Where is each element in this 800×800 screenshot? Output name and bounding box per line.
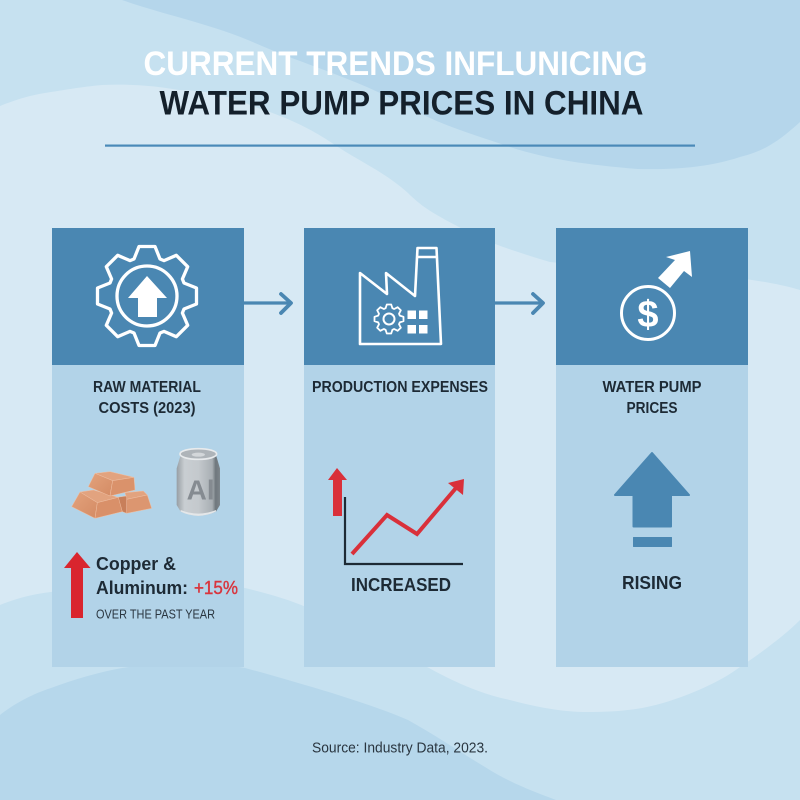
title: WATER PUMP PRICES IN CHINA — [160, 84, 644, 122]
arrow: production to prices — [495, 294, 543, 313]
stat: copper and aluminum increase — [96, 553, 238, 598]
panel heading: PRICES — [626, 400, 678, 417]
icon: dollar coin with arrow — [622, 251, 692, 340]
chart label: INCREASED — [351, 574, 451, 595]
stat: copper and aluminum increase: Copper & — [96, 553, 176, 574]
panel heading: RAW MATERIAL — [93, 379, 201, 396]
icon: factory with gear — [360, 248, 441, 344]
source note: Source: Industry Data, 2023. — [312, 740, 488, 756]
icon: red up arrow — [328, 468, 347, 516]
panel heading: WATER PUMP — [602, 379, 702, 396]
panel: production expenses — [304, 228, 495, 667]
title: CURRENT TRENDS INFLUNICING — [144, 45, 648, 83]
icon: blue up arrow — [615, 453, 689, 546]
icon: dollar coin with arrow: $ — [637, 294, 659, 336]
panel heading: PRODUCTION EXPENSES — [312, 379, 488, 396]
panel heading — [93, 379, 201, 417]
stat: copper and aluminum increase: +15% — [194, 577, 238, 598]
title — [144, 45, 648, 122]
panel heading: COSTS (2023) — [98, 400, 196, 417]
icon: red up arrow — [64, 552, 90, 618]
stat: copper and aluminum increase: Aluminum: — [96, 577, 188, 598]
status label: RISING — [622, 572, 682, 593]
icon: aluminum can: Al — [187, 474, 215, 505]
icon: gear with up arrow — [98, 246, 196, 346]
stat caption: OVER THE PAST YEAR — [96, 608, 215, 622]
icon: aluminum can — [177, 449, 220, 516]
chart: rising line — [345, 479, 464, 564]
arrow: raw materials to production — [244, 294, 291, 313]
icon: copper ingots — [72, 472, 152, 518]
title divider — [105, 144, 695, 147]
panel: raw material costs — [52, 228, 244, 667]
panel: water pump prices — [556, 228, 748, 667]
panel heading — [602, 379, 702, 417]
